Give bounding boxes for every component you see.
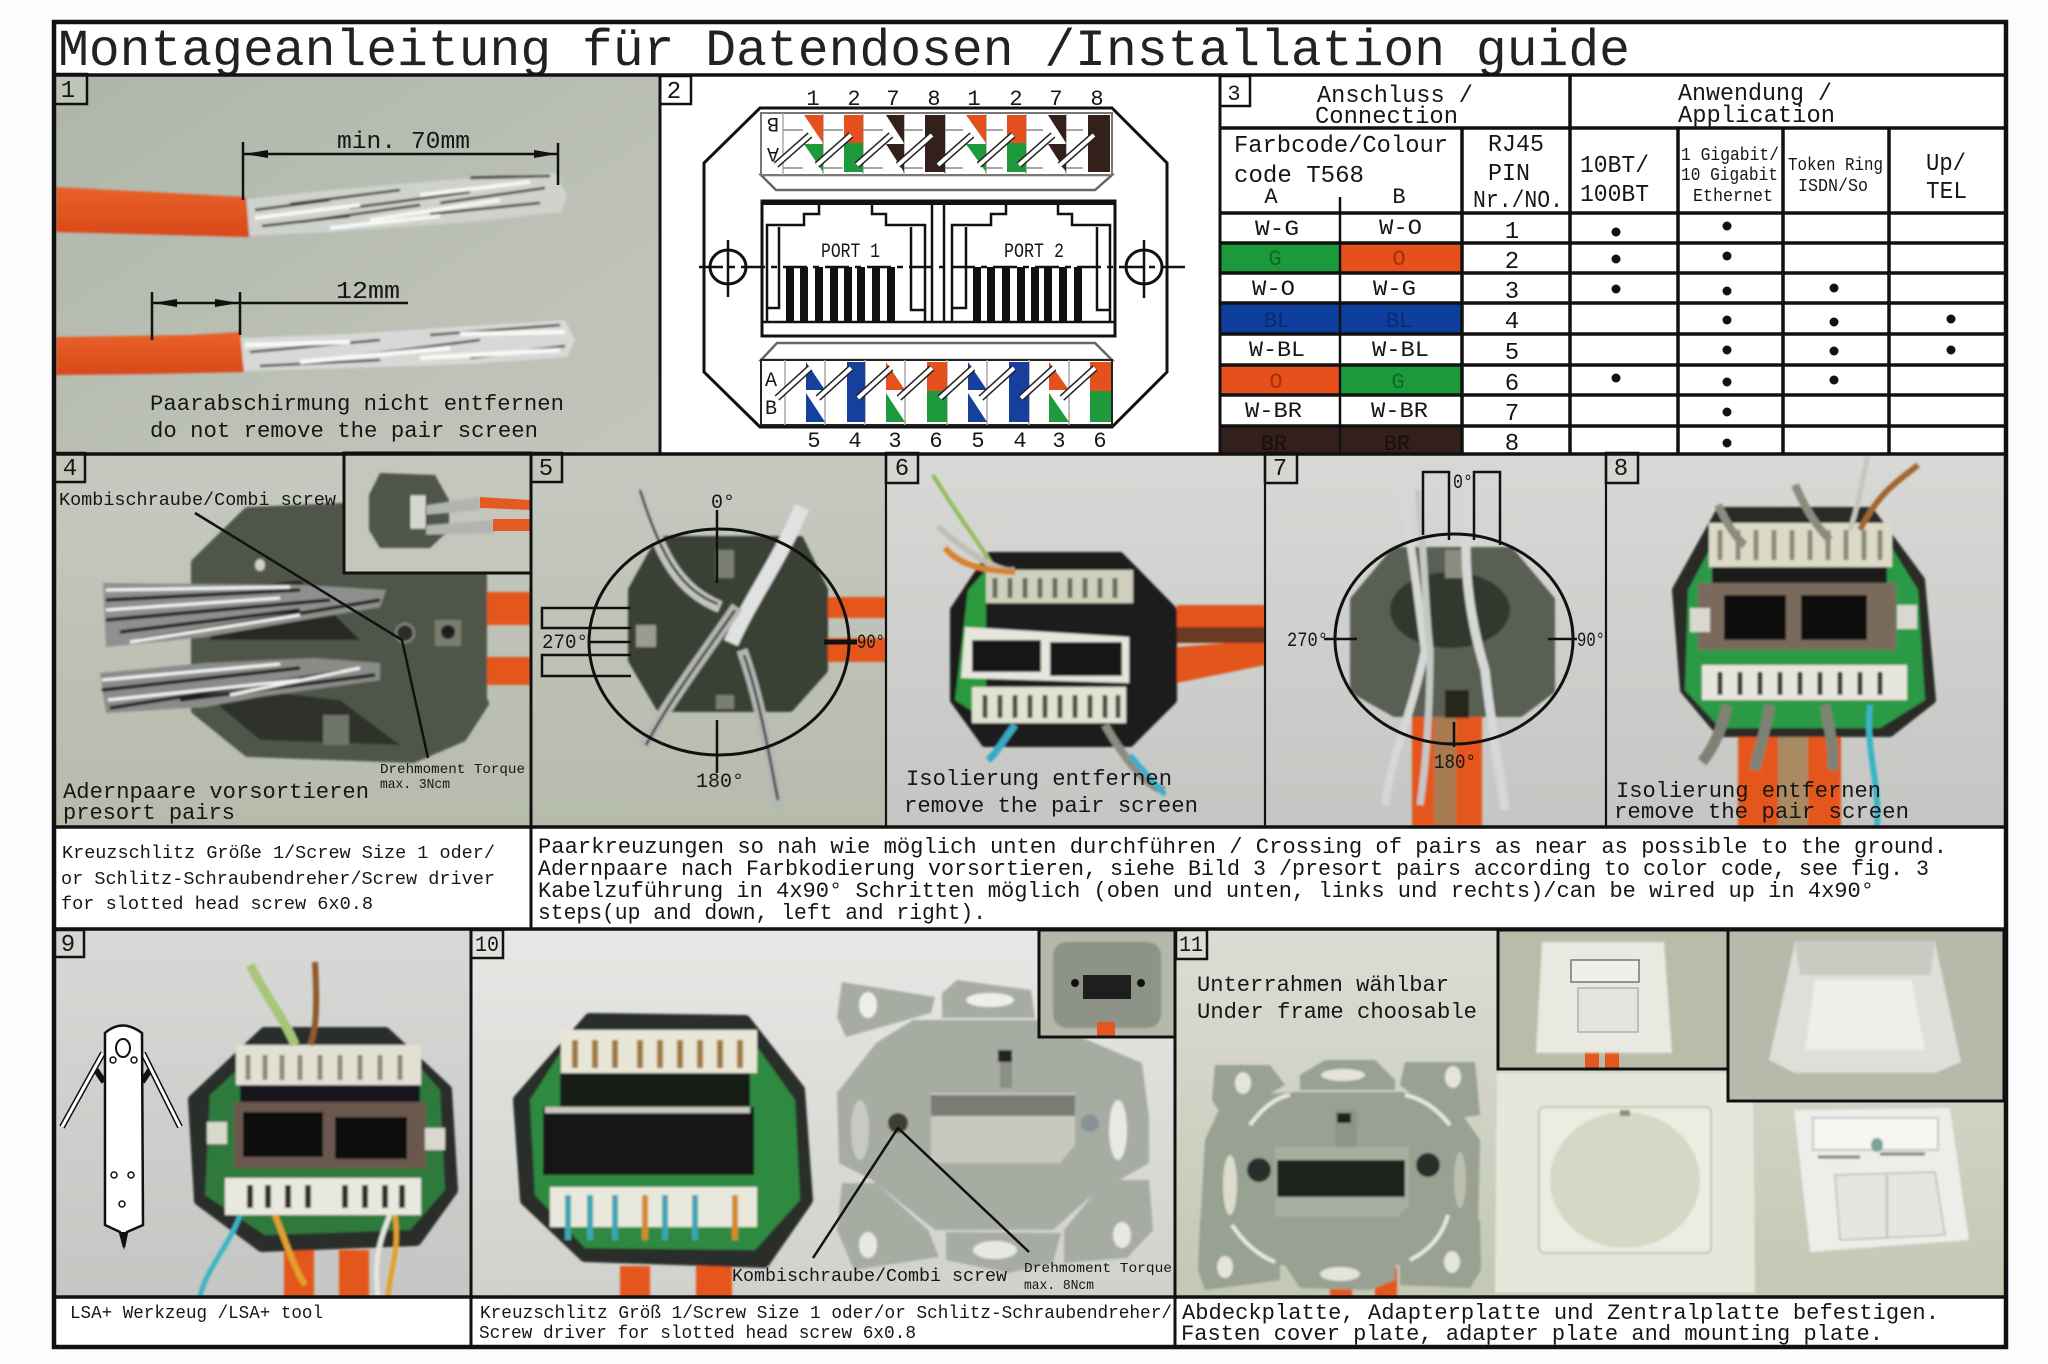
- label: torque: Drehmoment Torque: [1024, 1261, 1172, 1277]
- note: do not remove the pair screen: do not remove the pair screen: [150, 419, 538, 444]
- number 9: 9: [61, 932, 75, 959]
- caption: presort pairs: presort pairs: [63, 801, 235, 826]
- panel 2: wiring diagram: [660, 74, 1220, 454]
- column header: RJ45 pin: PIN: [1488, 161, 1530, 188]
- label: combi screw with leader lines: Kombischraube/Combi screw: [59, 491, 336, 511]
- bottom terminal block: A: [765, 370, 777, 393]
- panel 4: presort pairs photo: [54, 453, 531, 827]
- RJ45 pin numbers: [1505, 219, 1519, 458]
- bottom pin numbers: 5: [807, 429, 821, 454]
- number 8: 8: [1614, 456, 1628, 483]
- column header: colour code: [1234, 133, 1448, 210]
- panel 9: LSA+ tool and connector photo: [54, 930, 471, 1297]
- center line and mounting holes: [699, 240, 1185, 298]
- caption: screwdriver size: Screw driver for slotted head screw 6x0.8: [479, 1324, 916, 1344]
- column header: gigabit: [1681, 146, 1779, 207]
- inset: small housing view: [344, 453, 531, 573]
- label: torque: [380, 762, 525, 793]
- RJ45 pin numbers: 7: [1505, 401, 1519, 428]
- colour code labels T568 A: W-O: [1252, 277, 1295, 302]
- angle guide drawing: [1324, 472, 1577, 747]
- icon: LSA+ tool: [62, 1026, 180, 1250]
- panel 10: connector and mounting plate photo: [471, 930, 1175, 1297]
- column header: RJ45 pin: RJ45: [1488, 132, 1544, 159]
- colour code labels T568 B: BL: [1386, 309, 1412, 334]
- panel 11: under frame options photo: [1175, 930, 2006, 1297]
- photo: adapter module: [1794, 1108, 1969, 1252]
- caption: crossing of pairs instructions: Kabelzuführung in 4x90° Schritten möglich (oben und unten, links und rechts)/can be wired up in 4x90°: [538, 879, 1874, 904]
- number 10: 10: [475, 933, 499, 958]
- number 1: 1: [61, 78, 75, 105]
- caption: crossing of pairs instructions: Paarkreuzungen so nah wie möglich unten durchführen / Crossing of pairs as near as possible to the ground.: [538, 835, 1947, 860]
- column header: colour code: code T568: [1234, 163, 1364, 190]
- photo: housing and strands: [1354, 485, 1551, 827]
- dimension: min. 70mm: [243, 129, 558, 200]
- angle labels: 0°: [1453, 472, 1473, 495]
- caption: remove the pair screen: Isolierung entfernen: [906, 767, 1172, 792]
- caption: crossing of pairs instructions: [531, 827, 2006, 928]
- panel 5: crossing pairs photo: [531, 453, 886, 827]
- number 5: 5: [539, 456, 553, 483]
- number 1: [54, 74, 87, 105]
- label: torque: max. 8Ncm: [1024, 1278, 1094, 1294]
- colour code labels T568 A: BL: [1264, 309, 1290, 334]
- panel 6: remove the pair screen photo: [886, 453, 1265, 827]
- note: do not remove the pair screen: [150, 392, 564, 444]
- column header: token ring: [1788, 156, 1883, 197]
- caption: remove the pair screen: remove the pair screen: [904, 794, 1198, 819]
- number 7: 7: [1273, 456, 1287, 483]
- bottom pin numbers: 3: [1052, 429, 1066, 454]
- dimension: min. 70mm: min. 70mm: [337, 129, 470, 156]
- number 2: 2: [667, 79, 681, 106]
- top terminal block: [761, 111, 1112, 190]
- photo: lower cable: [56, 320, 575, 375]
- note: do not remove the pair screen: Paarabschirmung nicht entfernen: [150, 392, 564, 417]
- RJ45 pin numbers: 5: [1505, 340, 1519, 367]
- angle labels: 180°: [1434, 752, 1476, 775]
- label: combi screw with leader lines: [59, 491, 428, 758]
- angle labels: 270°: [1287, 630, 1328, 653]
- number 9: [54, 930, 84, 959]
- colour code labels T568 A: O: [1269, 370, 1283, 395]
- header: application: [1678, 81, 1835, 130]
- column header: colour code: Farbcode/Colour: [1234, 133, 1448, 160]
- colour code labels T568 B: W-O: [1379, 216, 1422, 241]
- bottom pin numbers: 4: [848, 429, 862, 454]
- caption: fasten plates: Abdeckplatte, Adapterplatte und Zentralplatte befestigen.: [1182, 1301, 1939, 1326]
- caption: LSA+ tool: [54, 1297, 471, 1347]
- port block: PORT 1: [821, 241, 880, 264]
- top terminal block: A: [767, 141, 779, 164]
- top pin numbers: 2: [847, 87, 861, 112]
- bottom pin numbers: 5: [971, 429, 985, 454]
- photo: upper cable: [56, 173, 567, 237]
- colour code labels T568 B: BR: [1384, 432, 1410, 457]
- caption: screwdriver size: Kreuzschlitz Größ 1/Screw Size 1 oder/or Schlitz-Schraubendreher/: [480, 1304, 1172, 1324]
- top pin numbers: 1: [967, 87, 981, 112]
- colour code labels T568 A: W-G: [1255, 217, 1299, 242]
- caption: screw size: Kreuzschlitz Größe 1/Screw Size 1 oder/: [62, 844, 495, 864]
- number 6: 6: [895, 456, 909, 483]
- angle labels: 90°: [857, 632, 885, 655]
- angle labels: [542, 492, 885, 794]
- top pin numbers: 2: [1009, 87, 1023, 112]
- header: connection: Anschluss /: [1317, 83, 1473, 110]
- panel 1: cable stripping photo: [54, 74, 660, 454]
- housing outline: [704, 108, 1167, 427]
- caption: remove the pair screen: [904, 767, 1198, 819]
- column header: RJ45 pin: Nr./NO.: [1473, 188, 1563, 215]
- top terminal block: B: [767, 111, 779, 134]
- panel 7: 4x90 degree routing photo: [1265, 453, 1606, 827]
- colour code labels T568 A: W-BL: [1249, 338, 1305, 363]
- colour code labels T568 A: BR: [1261, 432, 1287, 457]
- bottom pin numbers: 6: [1093, 429, 1107, 454]
- top pin numbers: 8: [1090, 87, 1104, 112]
- label: combi screw with leader lines: [732, 1128, 1029, 1287]
- note: under frame choosable: [1197, 973, 1477, 1025]
- column header: 10BT/100BT: 100BT: [1580, 182, 1649, 209]
- RJ45 pin numbers: 2: [1505, 249, 1519, 276]
- caption: remove the pair screen: [1614, 779, 1909, 825]
- caption: remove the pair screen: Isolierung entfernen: [1616, 779, 1881, 804]
- colour code labels T568 A: [1245, 217, 1305, 457]
- top pin numbers: 7: [1049, 87, 1063, 112]
- number 7: [1265, 453, 1297, 483]
- caption: crossing of pairs instructions: steps(up and down, left and right).: [538, 901, 986, 926]
- caption: presort pairs: Adernpaare vorsortieren: [63, 780, 369, 805]
- RJ45 pin numbers: 1: [1505, 219, 1519, 246]
- label: combi screw with leader lines: Kombischraube/Combi screw: [732, 1267, 1007, 1287]
- angle labels: 0°: [711, 492, 735, 515]
- column header: colour code: A: [1264, 185, 1278, 210]
- number 11: 11: [1179, 933, 1203, 958]
- note: under frame choosable: Unterrahmen wählbar: [1197, 973, 1449, 998]
- colour code labels T568 B: W-BR: [1371, 399, 1428, 424]
- number 3: 3: [1227, 82, 1241, 107]
- column header: Up/TEL: [1926, 151, 1967, 206]
- table grid: [1220, 76, 2006, 455]
- inset: mounting plate detail: [1039, 930, 1175, 1037]
- header: connection: Connection: [1315, 104, 1458, 131]
- angle labels: 270°: [542, 632, 588, 655]
- colour code labels T568 B: G: [1391, 370, 1405, 395]
- panel 3: colour code and application table: [1220, 76, 2006, 458]
- angle labels: 180°: [696, 771, 744, 794]
- port block: [762, 200, 1115, 336]
- column header: colour code: B: [1392, 185, 1406, 210]
- title: Montageanleitung für Datendosen /Installation guide: [58, 22, 1630, 81]
- caption: presort pairs: [63, 780, 369, 826]
- RJ45 pin numbers: 4: [1505, 309, 1519, 336]
- photo: housing and strands: [632, 483, 886, 808]
- bottom terminal block: B: [765, 398, 777, 421]
- angle labels: 90°: [1577, 630, 1605, 653]
- caption: crossing of pairs instructions: Adernpaare nach Farbkodierung vorsortieren, siehe Bild 3 /presort pairs according to color code, see fig. 3: [538, 857, 1929, 882]
- caption: fasten plates: [1175, 1297, 2006, 1347]
- bottom pin numbers: 6: [929, 429, 943, 454]
- bottom pin numbers: 4: [1013, 429, 1027, 454]
- colour code labels T568 B: W-G: [1373, 277, 1416, 302]
- column header: gigabit: 10 Gigabit: [1681, 166, 1778, 186]
- header: connection: [1315, 83, 1473, 131]
- column header: 10BT/100BT: 10BT/: [1580, 153, 1649, 180]
- label: torque: max. 3Ncm: [380, 777, 450, 793]
- column header: 10BT/100BT: [1580, 153, 1649, 209]
- port block: PORT 2: [1004, 241, 1064, 264]
- number 3: [1220, 76, 1250, 107]
- caption: screwdriver size: [471, 1297, 1175, 1347]
- number 5: [531, 453, 562, 483]
- number 2: [660, 76, 691, 106]
- top pin numbers: 7: [886, 87, 900, 112]
- caption: LSA+ tool: LSA+ Werkzeug /LSA+ tool: [70, 1304, 323, 1324]
- colour code labels T568 B: O: [1392, 247, 1406, 272]
- colour cells: [1220, 243, 1462, 455]
- inset: surface box open: [1728, 930, 2004, 1101]
- column header: gigabit: Ethernet: [1693, 187, 1773, 207]
- colour code labels T568 A: G: [1268, 247, 1282, 272]
- column header: Up/TEL: Up/: [1926, 151, 1966, 178]
- inset: surface box closed: [1498, 930, 1728, 1069]
- column header: gigabit: 1 Gigabit/: [1681, 146, 1779, 166]
- caption: screw size: [54, 827, 531, 928]
- top pin numbers: 8: [927, 87, 941, 112]
- header: application: Anwendung /: [1678, 81, 1832, 108]
- angle labels: [1287, 472, 1605, 775]
- number 8: [1606, 453, 1638, 483]
- photo: housing and cables: [100, 508, 531, 758]
- caption: screw size: or Schlitz-Schraubendreher/Screw driver: [61, 870, 495, 890]
- dimension: 12mm: [152, 279, 408, 340]
- number 4: [54, 453, 85, 483]
- dimension: 12mm: 12mm: [336, 279, 400, 306]
- label: torque: Drehmoment Torque: [380, 762, 525, 778]
- top pin numbers: 1: [806, 87, 820, 112]
- top pin numbers: [806, 87, 1104, 112]
- photo: metal mounting plate: [837, 980, 1153, 1273]
- photo: connector: [194, 962, 452, 1297]
- photo: connector: [1676, 455, 1932, 827]
- number 6: [886, 453, 918, 483]
- caption: fasten plates: Fasten cover plate, adapter plate and mounting plate.: [1181, 1322, 1883, 1347]
- panel 8: wired connector photo: [1606, 453, 2006, 827]
- application dots: [1612, 222, 1956, 448]
- photo: mounting plate with ports: [1198, 1060, 1481, 1297]
- photo: cover frame: [1495, 1073, 1755, 1293]
- note: under frame choosable: Under frame choosable: [1197, 1000, 1477, 1025]
- bottom terminal block: [761, 343, 1112, 425]
- label: torque: [1024, 1261, 1172, 1294]
- caption: screw size: for slotted head screw 6x0.8: [61, 895, 373, 915]
- colour code labels T568 A: W-BR: [1245, 399, 1302, 424]
- colour code labels T568 B: [1371, 216, 1429, 457]
- angle guide drawing: [542, 510, 857, 773]
- column header: RJ45 pin: [1473, 132, 1563, 215]
- column header: Up/TEL: TEL: [1926, 179, 1967, 206]
- column header: token ring: ISDN/So: [1798, 177, 1868, 197]
- photo: connector: [519, 1019, 807, 1297]
- header: application: Application: [1678, 103, 1835, 130]
- photo: connector: [933, 475, 1265, 795]
- caption: remove the pair screen: remove the pair screen: [1614, 800, 1909, 825]
- RJ45 pin numbers: 6: [1505, 371, 1519, 398]
- number 4: 4: [63, 456, 77, 483]
- column header: token ring: Token Ring: [1788, 156, 1883, 176]
- RJ45 pin numbers: 8: [1505, 431, 1519, 458]
- RJ45 pin numbers: 3: [1505, 279, 1519, 306]
- bottom pin numbers: [807, 429, 1107, 454]
- colour code labels T568 B: W-BL: [1372, 338, 1429, 363]
- bottom pin numbers: 3: [888, 429, 902, 454]
